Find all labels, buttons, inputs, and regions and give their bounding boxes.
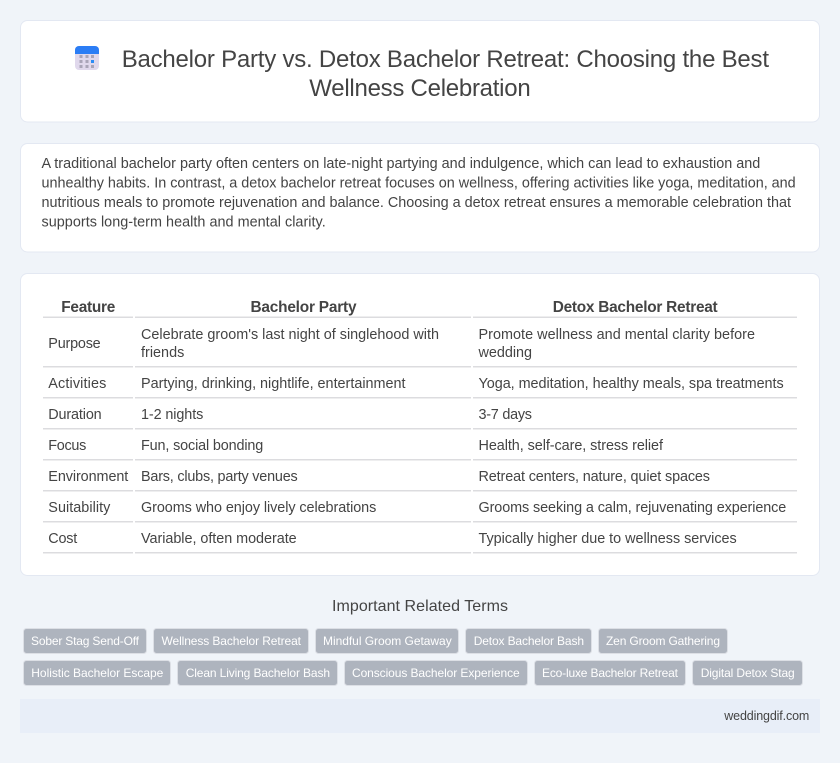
related term tags [24,628,802,686]
related term tags: Zen Groom Gathering [606,634,720,648]
icon: calendar [75,46,99,70]
row: suitability [48,500,786,516]
related term tags: Wellness Bachelor Retreat [162,634,302,648]
related term tags: Mindful Groom Getaway [323,634,452,648]
header panel [20,20,820,122]
row: duration: 1-2 nights [141,407,203,423]
row: focus: Focus [48,438,86,454]
row: duration [48,407,532,423]
table header row: Bachelor Party [250,299,357,316]
related term tags: Sober Stag Send-Off [31,634,140,648]
table header row [61,299,718,316]
row: purpose: Promote wellness and mental clarity before [478,327,755,343]
table header row: Detox Bachelor Retreat [553,299,718,316]
related term tags: Holistic Bachelor Escape [31,666,164,680]
row: focus [48,438,664,454]
row: suitability: Grooms seeking a calm, rejuvenating experience [478,500,786,516]
row: duration: 3-7 days [478,407,532,423]
title: Wellness Celebration [309,75,531,102]
row: focus: Fun, social bonding [141,438,263,454]
related term tags: Clean Living Bachelor Bash [186,666,330,680]
panel: introduction text: nutritious meals to promote rejuvenation and balance. Choosing a detox retreat ensures a memorable celebration that [42,195,791,211]
footer: weddingdif.com [723,709,809,723]
row: cost: Variable, often moderate [141,531,297,547]
row: purpose: friends [141,345,184,361]
row: purpose [48,327,755,361]
row: purpose: wedding [478,345,532,361]
row: suitability: Suitability [48,500,111,516]
panel: introduction text [20,144,820,252]
row: activities [48,376,784,392]
panel: comparison table [20,274,820,576]
row: cost: Cost [48,531,77,547]
row: cost [48,531,737,547]
table header row: Feature [61,299,116,316]
row: purpose: Purpose [48,336,101,352]
related term tags: Eco-luxe Bachelor Retreat [542,666,679,680]
panel: introduction text: supports long-term health and mental clarity. [42,214,326,230]
row: duration: Duration [48,407,102,423]
row: environment: Bars, clubs, party venues [141,469,298,485]
title: Bachelor Party vs. Detox Bachelor Retreat: Choosing the Best [122,46,769,73]
panel: introduction text: unhealthy habits. In contrast, a detox bachelor retreat focuses on wellness, offering activities like yoga, meditation, and [42,176,796,192]
row: cost: Typically higher due to wellness services [478,531,737,547]
row: activities: Partying, drinking, nightlife, entertainment [141,376,406,392]
row: activities: Yoga, meditation, healthy meals, spa treatments [478,376,784,392]
row: focus: Health, self-care, stress relief [478,438,664,454]
heading: related terms: Important Related Terms [332,598,508,615]
related term tags: Detox Bachelor Bash [474,634,584,648]
related term tags: Conscious Bachelor Experience [352,666,520,680]
row: environment: Retreat centers, nature, quiet spaces [478,469,710,485]
row: suitability: Grooms who enjoy lively celebrations [141,500,376,516]
panel: introduction text: A traditional bachelor party often centers on late-night partying and indulgence, which can lead to exhaustion and [42,156,760,172]
row: environment [48,469,710,485]
related term tags: Digital Detox Stag [701,666,795,680]
title [122,46,769,102]
footer [20,699,820,733]
row: purpose: Celebrate groom's last night of singlehood with [141,327,439,343]
row: activities: Activities [48,376,106,392]
row: environment: Environment [48,469,128,485]
